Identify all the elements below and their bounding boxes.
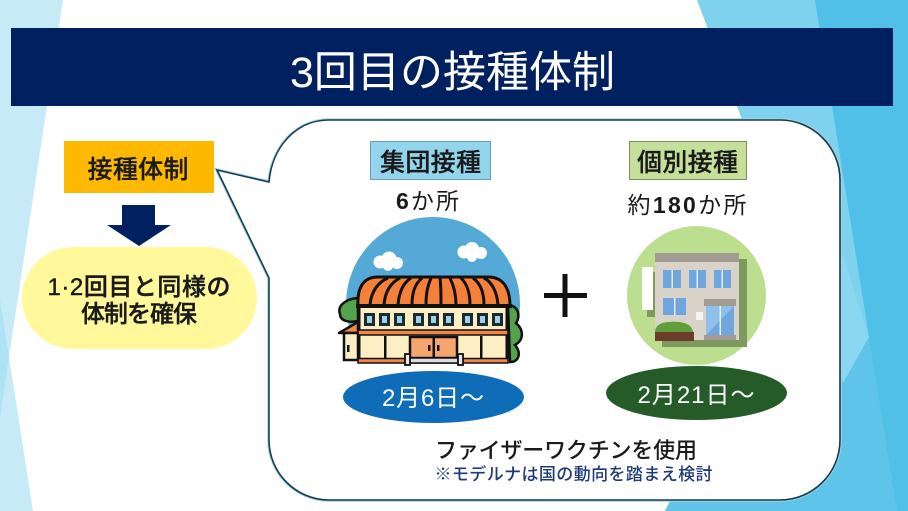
icon: gymnasium with sky [338, 217, 524, 366]
label: group vaccination: 集団接種 [380, 149, 481, 177]
clouds [374, 242, 487, 271]
roof [358, 277, 510, 306]
arrow: down [107, 205, 171, 246]
small annex [339, 322, 358, 333]
icon: plus sign [544, 274, 587, 317]
text: about 180 sites: 約180か所 [628, 192, 746, 218]
date pill: Feb 21 [606, 366, 787, 420]
base [358, 358, 508, 363]
entrance [704, 299, 736, 306]
label: individual vaccination [630, 142, 746, 180]
date pill: Feb 6: 2月6日～ [382, 385, 484, 412]
date pill: Feb 21: 2月21日～ [638, 382, 754, 409]
windows [663, 270, 731, 315]
label: individual vaccination: 個別接種 [637, 149, 738, 177]
speech bubble panel [217, 120, 840, 500]
title bar [11, 28, 893, 106]
callout: same system as doses 1 and 2: 1·2回目と同様の [48, 274, 230, 301]
note: Moderna under review: ※モデルナは国の動向を踏まえ検討 [434, 464, 712, 484]
icon: clinic building [627, 226, 766, 365]
label: group vaccination [370, 142, 490, 180]
heading: vaccination system [64, 141, 214, 193]
callout: same system as doses 1 and 2: 体制を確保 [81, 301, 197, 328]
mid band [358, 330, 508, 335]
callout: same system as doses 1 and 2 [22, 247, 257, 349]
planter [655, 322, 693, 332]
doors [410, 337, 457, 358]
text: Pfizer vaccine used: ファイザーワクチンを使用 [435, 438, 697, 463]
date pill: Feb 6 [343, 371, 524, 423]
bushes [339, 298, 522, 362]
title: 3回目の接種体制 [290, 49, 615, 97]
pillars [384, 336, 482, 359]
text: 6 sites: 6か所 [396, 188, 459, 214]
walls [359, 306, 507, 360]
heading: vaccination system: 接種体制 [88, 156, 188, 184]
windows [366, 314, 502, 324]
